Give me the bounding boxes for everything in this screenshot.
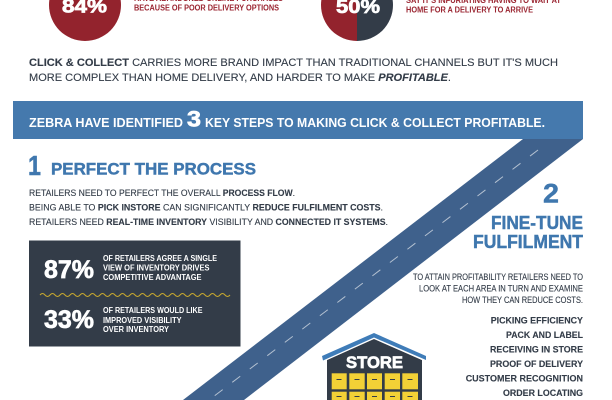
- heading: step 1: [28, 150, 256, 181]
- heading: step 2: 2: [543, 179, 559, 209]
- stat: 87%: [44, 254, 218, 284]
- list: fulfilment areas: CUSTOMER RECOGNITION: [466, 374, 583, 385]
- stat: 84% circle: [49, 0, 121, 41]
- list: fulfilment areas: PICKING EFFICIENCY: [491, 316, 584, 327]
- list: fulfilment areas: [466, 316, 584, 399]
- text: 84% description: [134, 0, 284, 12]
- text: 84% description: BECAUSE OF POOR DELIVERY OPTIONS: [134, 4, 280, 12]
- stat: 50% split circle: [321, 0, 393, 41]
- icon: store building: [322, 333, 426, 400]
- text: step 2 description: LOOK AT EACH AREA IN TURN AND EXAMINE: [419, 284, 583, 294]
- heading banner: ZEBRA HAVE IDENTIFIED: [29, 116, 183, 130]
- panel: inventory stats: [29, 240, 240, 346]
- intro text block: CLICK & COLLECT CARRIES MORE BRAND IMPACT THAN TRADITIONAL CHANNELS BUT IT'S MUCH: [29, 57, 558, 69]
- stat: 33%: 33%: [44, 306, 94, 334]
- stat: 33%: IMPROVED VISIBILITY: [103, 316, 182, 325]
- road: [183, 139, 583, 400]
- stat: 87%: OF RETAILERS AGREE A SINGLE: [103, 254, 218, 263]
- text: 50% description: HOME FOR A DELIVERY TO ARRIVE: [406, 6, 534, 15]
- yellow boxes: [332, 373, 418, 400]
- heading banner: [13, 101, 583, 139]
- heading: step 2: FINE-TUNE: [491, 213, 583, 233]
- list: fulfilment areas: PROOF OF DELIVERY: [490, 359, 584, 370]
- intro text block: MORE COMPLEX THAN HOME DELIVERY, AND HARDER TO MAKE PROFITABLE.: [29, 72, 451, 84]
- text: step 1 description: BEING ABLE TO PICK INSTORE CAN SIGNIFICANTLY REDUCE FULFILMENT COSTS.: [29, 202, 383, 212]
- heading banner: 3: [187, 106, 201, 132]
- intro text block: [29, 57, 558, 84]
- list: fulfilment areas: ORDER LOCATING: [503, 388, 583, 399]
- icon: store building: STORE: [346, 353, 403, 372]
- text: step 1 description: RETAILERS NEED REAL-TIME INVENTORY VISIBILITY AND CONNECTED IT SYSTEMS.: [29, 217, 388, 227]
- stat: 33%: OF RETAILERS WOULD LIKE: [103, 306, 203, 315]
- stat: 87%: COMPETITIVE ADVANTAGE: [103, 273, 202, 282]
- list: fulfilment areas: RECEIVING IN STORE: [490, 345, 584, 356]
- stat: 33%: [44, 306, 203, 334]
- stat: 33%: OVER INVENTORY: [103, 325, 170, 334]
- heading banner: KEY STEPS TO MAKING CLICK & COLLECT PROFITABLE.: [205, 116, 545, 130]
- heading: step 1: 1: [28, 150, 41, 181]
- list: fulfilment areas: PACK AND LABEL: [506, 330, 583, 341]
- heading: step 2: [473, 179, 583, 252]
- heading: step 1: PERFECT THE PROCESS: [51, 160, 256, 178]
- text: step 1 description: [29, 188, 388, 227]
- text: 50% description: [406, 0, 561, 15]
- text: step 2 description: HOW THEY CAN REDUCE COSTS.: [462, 295, 583, 305]
- text: step 1 description: RETAILERS NEED TO PERFECT THE OVERALL PROCESS FLOW.: [29, 188, 295, 198]
- stat: 87%: VIEW OF INVENTORY DRIVES: [103, 264, 210, 273]
- heading: step 2: FULFILMENT: [473, 232, 583, 252]
- stat: 87%: 87%: [44, 256, 94, 284]
- text: step 2 description: [413, 272, 583, 305]
